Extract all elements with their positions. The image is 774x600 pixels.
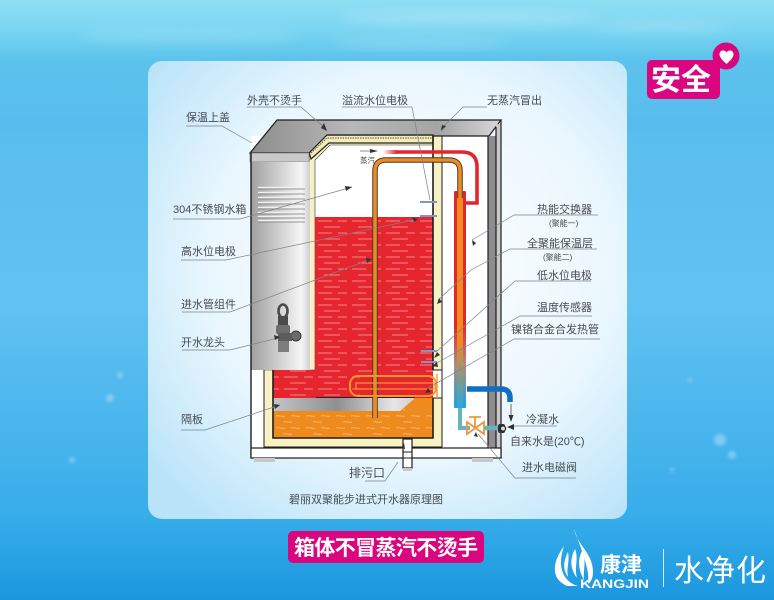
labels: right column: 热能交换器 <box>537 202 592 216</box>
lid <box>250 120 501 153</box>
labels: right column: (聚能二) <box>543 252 573 262</box>
outer white cabinet <box>251 136 501 458</box>
tank wall lines <box>273 136 433 438</box>
diagram caption: 碧丽双聚能步进式开水器原理图 <box>289 492 443 506</box>
top insulation band <box>309 135 433 159</box>
banner: headline: 箱体不冒蒸汽不烫手 <box>294 537 478 560</box>
hot water upper <box>315 217 433 371</box>
labels: right column: 进水电磁阀 <box>522 460 577 474</box>
logo: Kangjin <box>555 529 766 591</box>
label: drain: 排污口 <box>349 466 385 480</box>
labels: right column: (聚能一) <box>549 218 579 228</box>
right side wall <box>488 136 496 458</box>
labels: top row: 外壳不烫手 <box>247 93 302 107</box>
hot water lower <box>273 370 433 399</box>
leader arrow heads <box>274 123 514 449</box>
labels: left column: 开水龙头 <box>181 336 225 349</box>
logo: Kangjin: KANGJIN <box>580 577 649 591</box>
logo: Kangjin: 水净化 <box>674 555 766 588</box>
labels: right column: 自来水是(20℃) <box>510 435 585 448</box>
labels: left column <box>173 110 246 426</box>
labels: top row <box>247 93 542 107</box>
icon: solenoid valve <box>467 417 484 434</box>
badge: safety: 安全 <box>651 64 711 97</box>
electrodes <box>420 202 437 362</box>
labels: left column: 304不锈钢水箱 <box>173 202 246 216</box>
leader lines <box>173 107 600 481</box>
labels: right column: 低水位电极 <box>537 268 592 282</box>
lid front band <box>250 153 309 162</box>
drain pipe <box>403 439 412 468</box>
heating element <box>350 374 437 398</box>
teal feed pipe <box>460 408 470 428</box>
diagram: water boiler cross-section <box>250 120 514 471</box>
labels: left column: 高水位电极 <box>181 244 236 258</box>
labels: left column: 隔板 <box>181 412 203 426</box>
base plate <box>251 448 501 458</box>
condensate pipe <box>467 389 510 402</box>
labels: right column <box>510 202 599 474</box>
warm water bottom tank <box>273 398 433 438</box>
steam arrow and label <box>360 149 378 165</box>
badge: safety <box>647 42 740 99</box>
front panel <box>251 162 310 370</box>
labels: right column: 镍铬合金合发热管 <box>511 322 599 336</box>
baffle plate <box>273 398 415 411</box>
vent slots <box>258 188 305 222</box>
icon: faucet <box>276 304 301 352</box>
labels: left column: 进水管组件 <box>181 297 236 311</box>
labels: right column: 冷凝水 <box>526 412 559 426</box>
labels: top row: 无蒸汽冒出 <box>487 93 542 107</box>
labels: right column: 全聚能保温层 <box>527 236 593 250</box>
connector <box>498 424 505 433</box>
panel: main diagram card <box>148 61 627 519</box>
icon: flame water drop <box>555 529 593 586</box>
labels: right column: 温度传感器 <box>537 300 592 314</box>
logo: Kangjin: 康津 <box>600 553 642 577</box>
steam arrow and label: 蒸汽 <box>360 155 375 165</box>
labels: top row: 溢流水位电极 <box>342 93 408 107</box>
heat exchanger jacket <box>454 191 466 408</box>
inlet tube <box>375 160 460 418</box>
banner: headline <box>288 531 484 563</box>
insulation layer <box>264 135 442 447</box>
steam pipe <box>383 150 397 154</box>
labels: left column: 保温上盖 <box>186 110 230 124</box>
